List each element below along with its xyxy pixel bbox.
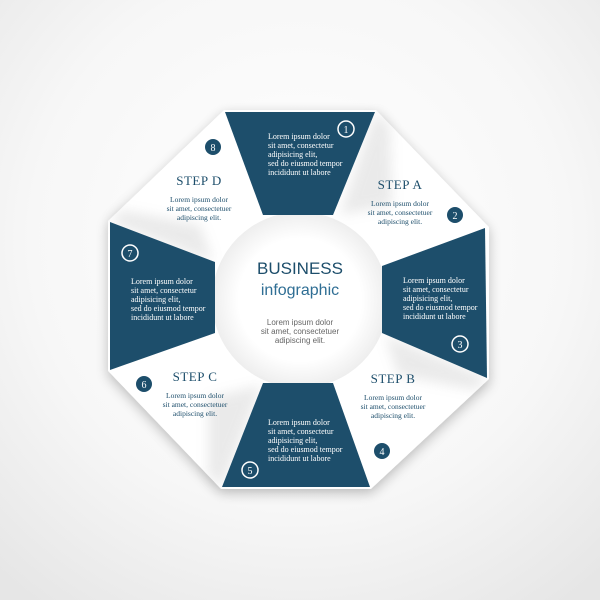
panel: 7 left: sit amet, consectetur xyxy=(131,286,197,295)
center text xyxy=(261,318,339,345)
step D: Lorem ipsum dolor xyxy=(170,195,228,204)
center text: sit amet, consectetuer xyxy=(261,327,339,336)
step C xyxy=(136,369,228,418)
step B: sit amet, consectetuer xyxy=(361,402,426,411)
step C: Lorem ipsum dolor xyxy=(166,391,224,400)
panel: 3 right: Lorem ipsum dolor xyxy=(403,276,465,285)
panel: 1 top: adipisicing elit, xyxy=(268,150,317,159)
panel: 3 right: sit amet, consectetur xyxy=(403,285,469,294)
center title: BUSINESS xyxy=(257,259,343,278)
center title xyxy=(257,259,343,299)
panel: 3 right: adipisicing elit, xyxy=(403,294,452,303)
step A xyxy=(368,177,463,226)
step D: sit amet, consectetuer xyxy=(167,204,232,213)
panel: 1 top: sit amet, consectetur xyxy=(268,141,334,150)
step B: Lorem ipsum dolor xyxy=(364,393,422,402)
panel: 1 top: 1 xyxy=(344,125,348,136)
step D: adipiscing elit. xyxy=(177,213,221,222)
step A: sit amet, consectetuer xyxy=(368,208,433,217)
center circle xyxy=(212,212,388,388)
center text: adipiscing elit. xyxy=(275,336,325,345)
panel: 5 bottom: Lorem ipsum dolor xyxy=(268,418,330,427)
panel: 1 top xyxy=(225,112,375,215)
step A: 2 xyxy=(452,211,458,222)
step A: adipiscing elit. xyxy=(378,217,422,226)
step B: 4 xyxy=(380,447,384,458)
step A: Lorem ipsum dolor xyxy=(371,199,429,208)
panel: 7 left: 7 xyxy=(128,249,132,260)
panel: 5 bottom: incididunt ut labore xyxy=(268,454,331,463)
step D: STEP D xyxy=(176,173,222,188)
panel: 3 right: 3 xyxy=(458,340,462,351)
panel: 1 top: sed do eiusmod tempor xyxy=(268,159,343,168)
panel: 3 right: sed do eiusmod tempor xyxy=(403,303,478,312)
panel: 7 left: sed do eiusmod tempor xyxy=(131,304,206,313)
panel: 5 bottom: 5 xyxy=(248,466,252,477)
step C: adipiscing elit. xyxy=(173,409,217,418)
octagon base xyxy=(110,112,487,487)
step D: 8 xyxy=(210,143,216,154)
step D xyxy=(167,139,232,222)
panel: 5 bottom: sit amet, consectetur xyxy=(268,427,334,436)
panel: 7 left: Lorem ipsum dolor xyxy=(131,277,193,286)
center title: infographic xyxy=(261,282,339,299)
panel: 5 bottom: sed do eiusmod tempor xyxy=(268,445,343,454)
panel: 3 right xyxy=(382,228,487,378)
step A: STEP A xyxy=(378,177,423,192)
panel: 1 top: Lorem ipsum dolor xyxy=(268,132,330,141)
step C: 6 xyxy=(142,380,146,391)
panel: 7 left: adipisicing elit, xyxy=(131,295,180,304)
panel: 5 bottom: adipisicing elit, xyxy=(268,436,317,445)
segment shadows xyxy=(110,112,487,487)
panel: 7 left: incididunt ut labore xyxy=(131,313,194,322)
panel: 7 left xyxy=(110,222,215,370)
step B: STEP B xyxy=(371,371,415,386)
panel: 5 bottom xyxy=(222,383,370,487)
panel: 3 right: incididunt ut labore xyxy=(403,312,466,321)
step B: adipiscing elit. xyxy=(371,411,415,420)
panel: 1 top: incididunt ut labore xyxy=(268,168,331,177)
step B xyxy=(361,371,426,459)
step C: STEP C xyxy=(173,369,217,384)
step C: sit amet, consectetuer xyxy=(163,400,228,409)
center text: Lorem ipsum dolor xyxy=(267,318,333,327)
